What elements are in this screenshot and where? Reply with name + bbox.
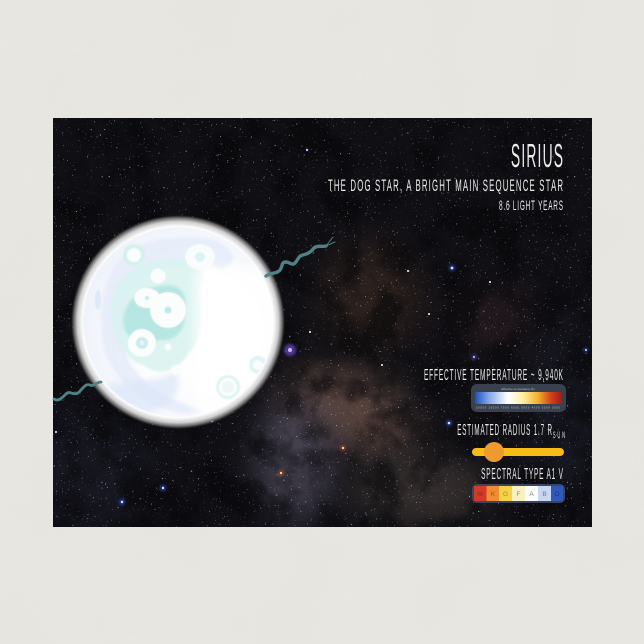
spectral bar: B xyxy=(542,491,547,498)
temperature scale: 30000 10000 7500 6000 5000 4000 3500 3000 xyxy=(476,406,561,410)
distance: 8.6 LIGHT YEARS xyxy=(499,198,563,214)
surface rings xyxy=(95,244,267,399)
star surface mottling xyxy=(102,238,233,413)
temperature label: EFFECTIVE TEMPERATURE ~ 9,940K xyxy=(424,366,563,384)
spectral bar: M xyxy=(477,491,483,498)
icon: jet wave left xyxy=(54,382,101,400)
spectral bar: O xyxy=(554,491,560,498)
spectral bar: K xyxy=(491,491,496,498)
milky way glow xyxy=(30,240,600,530)
panel: estimated radius xyxy=(457,421,565,462)
temperature scale xyxy=(471,384,566,412)
subtitle: THE DOG STAR, A BRIGHT MAIN SEQUENCE STAR xyxy=(328,176,563,195)
panel: effective temperature xyxy=(424,366,566,412)
star: Sirius disc xyxy=(83,227,266,417)
star glow xyxy=(71,215,285,429)
panel: night sky xyxy=(30,118,600,530)
title: SIRIUS xyxy=(511,138,563,175)
panel: spectral type xyxy=(472,465,565,503)
spectral bar: G xyxy=(503,491,508,498)
radius slider xyxy=(472,442,564,462)
bright stars xyxy=(55,149,589,506)
spectral label: SPECTRAL TYPE A1 V xyxy=(481,465,563,483)
spectral bar: F xyxy=(517,491,521,498)
temperature scale: Effective temperature (K) xyxy=(501,387,535,391)
radius unit: SUN xyxy=(553,432,565,441)
icon: jet wave right xyxy=(266,237,335,276)
spectral bar: A xyxy=(529,491,534,498)
spectral bar xyxy=(472,484,565,503)
radius label: ESTIMATED RADIUS 1.7 R xyxy=(457,421,552,439)
